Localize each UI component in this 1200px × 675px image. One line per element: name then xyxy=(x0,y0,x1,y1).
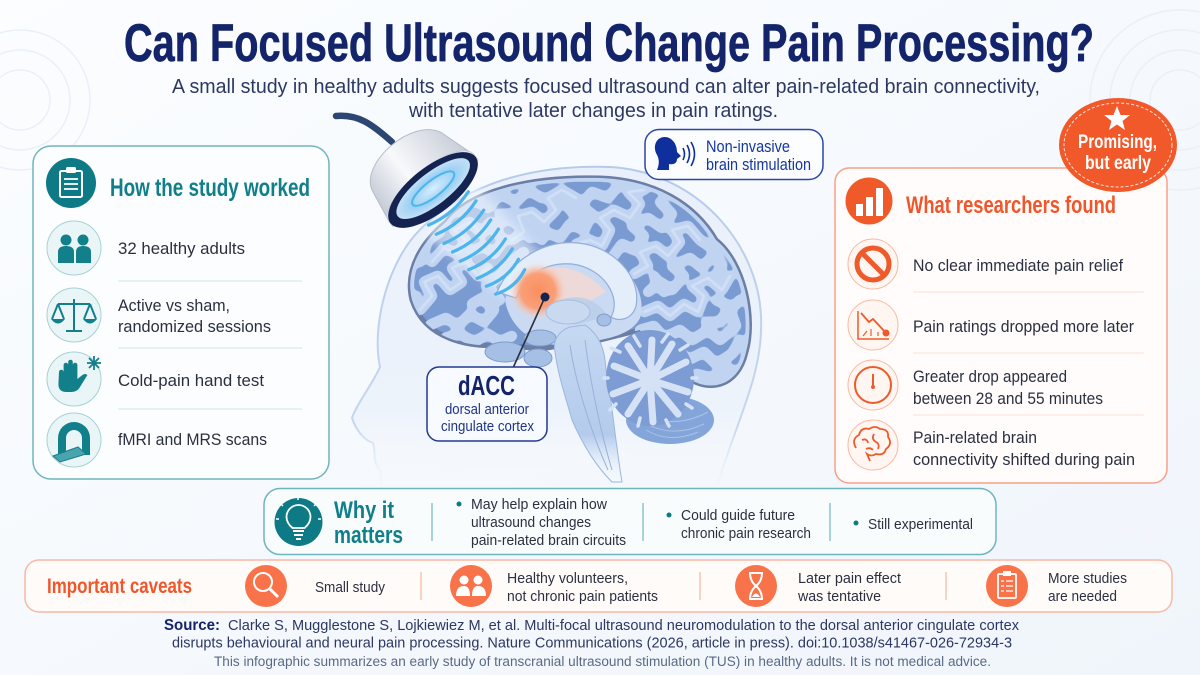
brain xyxy=(410,178,749,385)
point: explains circuits: May help explain how xyxy=(471,496,607,513)
item: 28 to 55 minutes: between 28 and 55 minutes xyxy=(913,389,1103,408)
heading xyxy=(334,497,403,549)
item: brain connectivity xyxy=(848,420,1135,470)
head silhouette xyxy=(352,167,761,490)
item: pain ratings dropped xyxy=(848,300,1134,350)
panel: what researchers found xyxy=(835,168,1167,483)
caveat: small study: Small study xyxy=(315,579,385,596)
heading: matters xyxy=(334,522,403,549)
source citation: Clarke S, Mugglestone S, Lojkiewiez M, et al. Multi-focal ultrasound neuromodulation to the dorsal anterior cingulate cortex xyxy=(228,617,1019,634)
point: still experimental: Still experimental xyxy=(868,516,973,533)
heading: Why it xyxy=(334,497,394,524)
caveat: healthy volunteers xyxy=(450,565,658,607)
panel: important caveats xyxy=(25,560,1172,612)
item: scans xyxy=(47,413,267,467)
point: future research xyxy=(666,507,811,542)
cerebellum xyxy=(604,330,714,444)
icon: bar chart xyxy=(846,178,892,224)
illustration: head and brain with ultrasound transducer xyxy=(336,109,761,490)
badge text: but early xyxy=(1085,153,1151,174)
callout: dACC: dorsal anterior xyxy=(445,402,529,418)
caveat: later pain effect xyxy=(735,565,902,607)
inner brain structures xyxy=(497,243,642,345)
point: explains circuits: ultrasound changes xyxy=(471,514,591,531)
source citation: disrupts behavioural and neural pain processing. Nature Communications (2026, article in press). doi:10.1038/s41467-026-72934-3 xyxy=(172,634,1012,652)
item: active vs sham: randomized sessions xyxy=(118,317,271,336)
icon: star xyxy=(1104,106,1130,130)
point: future research: chronic pain research xyxy=(681,525,811,542)
callout: dACC: dACC xyxy=(458,370,515,401)
label: brain stimulation xyxy=(706,156,811,174)
item: 28 to 55 minutes: Greater drop appeared xyxy=(913,367,1067,386)
caveat: more studies xyxy=(986,565,1127,607)
disclaimer: This infographic summarizes an early study of transcranial ultrasound stimulation (TUS) in healthy adults. It is not medical advice. xyxy=(214,654,991,669)
panel: why it matters xyxy=(264,488,996,554)
heading: What researchers found xyxy=(906,192,1116,219)
icon: light bulb xyxy=(274,497,322,546)
caveat: more studies: More studies xyxy=(1048,570,1127,587)
item: participants: 32 healthy adults xyxy=(118,239,245,258)
heading: How the study worked xyxy=(110,174,310,202)
caveat: later pain effect: Later pain effect xyxy=(798,570,902,587)
subtitle xyxy=(172,75,1040,122)
ultrasound waves xyxy=(429,192,533,302)
item: participants xyxy=(47,221,245,275)
callout: non-invasive brain stimulation xyxy=(645,130,823,180)
item: brain connectivity: connectivity shifted during pain xyxy=(913,450,1135,469)
badge text xyxy=(1078,132,1157,174)
item: 28 to 55 minutes xyxy=(848,360,1103,410)
heading: Important caveats xyxy=(47,575,192,598)
badge text: Promising, xyxy=(1078,132,1157,153)
item: scans: fMRI and MRS scans xyxy=(118,430,267,449)
item: no immediate relief: No clear immediate pain relief xyxy=(913,256,1123,275)
badge: promising, but early xyxy=(1059,98,1177,192)
caveat: healthy volunteers: Healthy volunteers, xyxy=(507,570,628,587)
point: explains circuits xyxy=(456,496,626,549)
brainstem xyxy=(554,325,622,482)
item: cold-pain hand test: Cold-pain hand test xyxy=(118,371,264,390)
label: Non-invasive xyxy=(706,138,790,156)
point: future research: Could guide future xyxy=(681,507,795,524)
subtitle: with tentative later changes in pain ratings. xyxy=(408,99,778,122)
caveat: small study xyxy=(245,565,385,607)
transducer xyxy=(336,109,490,241)
source citation: Source: xyxy=(164,617,220,634)
beam path highlight xyxy=(422,178,548,300)
item: brain connectivity: Pain-related brain xyxy=(913,428,1037,447)
item: cold-pain hand test xyxy=(47,352,264,406)
callout: dACC: cingulate cortex xyxy=(441,419,535,435)
label xyxy=(706,138,811,174)
caveat: healthy volunteers: not chronic pain patients xyxy=(507,588,658,605)
subtitle: A small study in healthy adults suggests focused ultrasound can alter pain-related brain connectivity, xyxy=(172,75,1040,98)
caveat: later pain effect: was tentative xyxy=(797,588,881,605)
pointer line to dACC xyxy=(513,292,550,368)
caveat: more studies: are needed xyxy=(1048,588,1117,605)
icon: head with sound waves xyxy=(655,137,694,170)
callout: dACC xyxy=(427,367,547,441)
lower brain blobs xyxy=(485,314,611,367)
item: active vs sham xyxy=(47,288,271,342)
panel: how the study worked xyxy=(33,146,329,479)
icon: clipboard xyxy=(46,158,96,208)
source citation xyxy=(164,617,1019,652)
item: no immediate relief xyxy=(848,239,1123,289)
point: explains circuits: pain-related brain circuits xyxy=(471,532,626,549)
item: pain ratings dropped: Pain ratings dropped more later xyxy=(913,317,1134,336)
item: active vs sham: Active vs sham, xyxy=(118,296,230,315)
